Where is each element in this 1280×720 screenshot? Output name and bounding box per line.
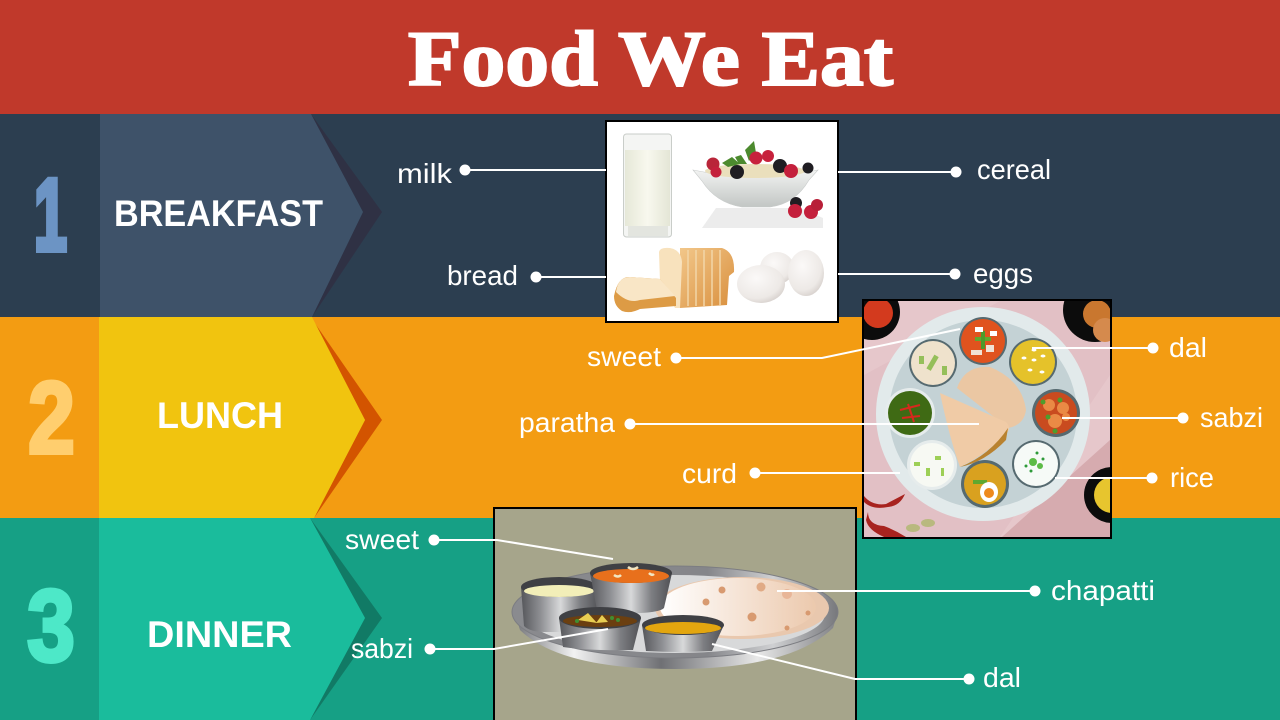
callout: rice: rice bbox=[1170, 462, 1214, 493]
photo: breakfast foods bbox=[606, 121, 838, 322]
callout: chapatti: chapatti bbox=[1051, 575, 1155, 606]
bowl: sabzi bbox=[559, 607, 641, 650]
panel: lunch row bbox=[0, 317, 1280, 518]
callout: sabzi bbox=[1062, 402, 1263, 433]
callout: dal: dal bbox=[983, 662, 1021, 693]
bowl: egg curry bbox=[961, 460, 1009, 508]
title: Food We Eat bbox=[408, 15, 893, 102]
panel: breakfast row bbox=[0, 114, 1280, 317]
bowl: curd bbox=[521, 577, 600, 632]
callouts: dinner bbox=[345, 524, 1155, 693]
icon: glass of milk bbox=[624, 134, 672, 237]
callout: sweet: sweet bbox=[345, 524, 419, 555]
lunch heading: LUNCH bbox=[157, 395, 283, 436]
callout: eggs bbox=[838, 258, 1033, 289]
callouts: lunch bbox=[519, 329, 1263, 493]
icon: loaf of bread bbox=[614, 248, 734, 312]
dinner chevron shadow bbox=[310, 518, 382, 720]
callout: sweet bbox=[345, 524, 613, 559]
icon: plate bbox=[876, 307, 1090, 521]
panel: dinner row bbox=[0, 518, 1280, 720]
icon: paratha bbox=[940, 367, 1026, 467]
number 2: 2 bbox=[28, 361, 75, 475]
lunch chevron bbox=[99, 317, 365, 518]
bowl: curd bbox=[907, 440, 957, 490]
bowl: raita bbox=[909, 339, 957, 387]
callout: dal: dal bbox=[1169, 332, 1207, 363]
number 1: 1 bbox=[34, 158, 67, 272]
breakfast chevron shadow bbox=[311, 114, 382, 317]
callout: sabzi: sabzi bbox=[351, 633, 413, 664]
callout: eggs: eggs bbox=[973, 258, 1033, 289]
title banner bbox=[0, 0, 1280, 114]
callouts: breakfast bbox=[397, 154, 1051, 291]
photo: lunch thali bbox=[862, 299, 1112, 539]
bowl: rice bbox=[1012, 440, 1060, 488]
callout: rice bbox=[1055, 462, 1214, 493]
callout: curd bbox=[682, 458, 900, 489]
dinner heading: DINNER bbox=[147, 614, 292, 655]
icon: cereal bowl bbox=[693, 141, 823, 228]
callout: sabzi: sabzi bbox=[1200, 402, 1263, 433]
bowl: orange sweet bbox=[590, 563, 672, 613]
callout: milk bbox=[397, 158, 606, 189]
callout: paratha: paratha bbox=[519, 407, 615, 438]
number 3: 3 bbox=[27, 569, 75, 683]
callout: cereal: cereal bbox=[977, 154, 1051, 185]
photo: dinner thali bbox=[494, 508, 856, 720]
icon: chillies and seeds bbox=[864, 494, 935, 537]
breakfast heading: BREAKFAST bbox=[114, 193, 323, 234]
callout: bread bbox=[447, 260, 606, 291]
callout: milk: milk bbox=[397, 158, 453, 189]
callout: chapatti bbox=[777, 575, 1155, 606]
icon: steel plate bbox=[512, 566, 838, 669]
icon: eggs bbox=[737, 250, 824, 303]
callout: paratha bbox=[519, 407, 979, 438]
callout: dal bbox=[712, 644, 1021, 693]
bowl: red curry bbox=[959, 317, 1007, 365]
bowl: vegetable sabzi bbox=[1032, 389, 1080, 437]
dinner chevron bbox=[99, 518, 365, 720]
callout: curd: curd bbox=[682, 458, 737, 489]
icon: chapatti bbox=[655, 577, 829, 639]
callout: sweet: sweet bbox=[587, 341, 661, 372]
callout: bread: bread bbox=[447, 260, 518, 291]
bowl: dal bbox=[642, 615, 724, 652]
callout: dal bbox=[1032, 332, 1207, 363]
callout: cereal bbox=[838, 154, 1051, 185]
callout: sabzi bbox=[351, 629, 608, 664]
bowl: green curry bbox=[885, 388, 935, 438]
breakfast chevron bbox=[100, 114, 363, 317]
callout: sweet bbox=[587, 329, 960, 372]
icon: corner bowls bbox=[864, 301, 1110, 523]
bowl: yellow dal bbox=[1009, 338, 1057, 386]
lunch chevron shadow bbox=[314, 322, 382, 518]
